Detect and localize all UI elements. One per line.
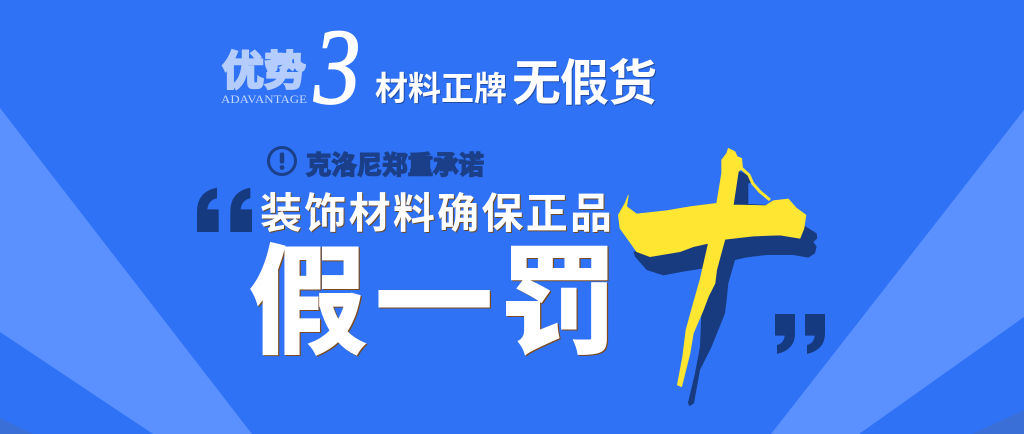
heading: material genuine bbox=[375, 57, 658, 112]
right light ray bbox=[771, 110, 1024, 434]
right corner ray bbox=[972, 410, 1024, 434]
heading: advantage label: ADAVANTAGE bbox=[221, 94, 307, 106]
brush character ten: yellow bbox=[618, 148, 806, 387]
heading: advantage label: 优势 bbox=[222, 48, 306, 94]
heading: material genuine: 材料正牌 bbox=[375, 70, 507, 107]
headline: fake one penalty: 假 bbox=[249, 238, 367, 370]
left light ray bbox=[0, 108, 252, 434]
opening quotation mark bbox=[197, 188, 252, 232]
heading: number 3: 3 bbox=[313, 6, 360, 127]
heading: material genuine: 无假货 bbox=[513, 58, 658, 112]
headline: fake one penalty: 罚 bbox=[500, 238, 618, 370]
heading: material genuine: 材料正牌 bbox=[376, 71, 508, 108]
icon: exclamation circle bbox=[268, 148, 296, 174]
headline: fake one penalty: 罚 bbox=[501, 239, 619, 371]
headline: materials guaranteed genuine: 装饰材料确保正品 bbox=[260, 190, 612, 237]
headline: fake one penalty: 一 bbox=[376, 240, 494, 372]
heading: material genuine: 无假货 bbox=[512, 57, 657, 111]
headline: fake one penalty: 一 bbox=[375, 239, 493, 371]
closing quotation mark bbox=[775, 314, 825, 354]
brush character ten: shadow bbox=[633, 171, 817, 406]
headline: fake one penalty: 假 bbox=[250, 239, 368, 371]
left corner ray bbox=[0, 418, 33, 434]
headline: materials guaranteed genuine: 装饰材料确保正品 bbox=[261, 191, 613, 238]
subheading: solemn promise: 克洛尼郑重承诺 bbox=[306, 152, 484, 180]
headline: fake one penalty bbox=[249, 238, 619, 372]
